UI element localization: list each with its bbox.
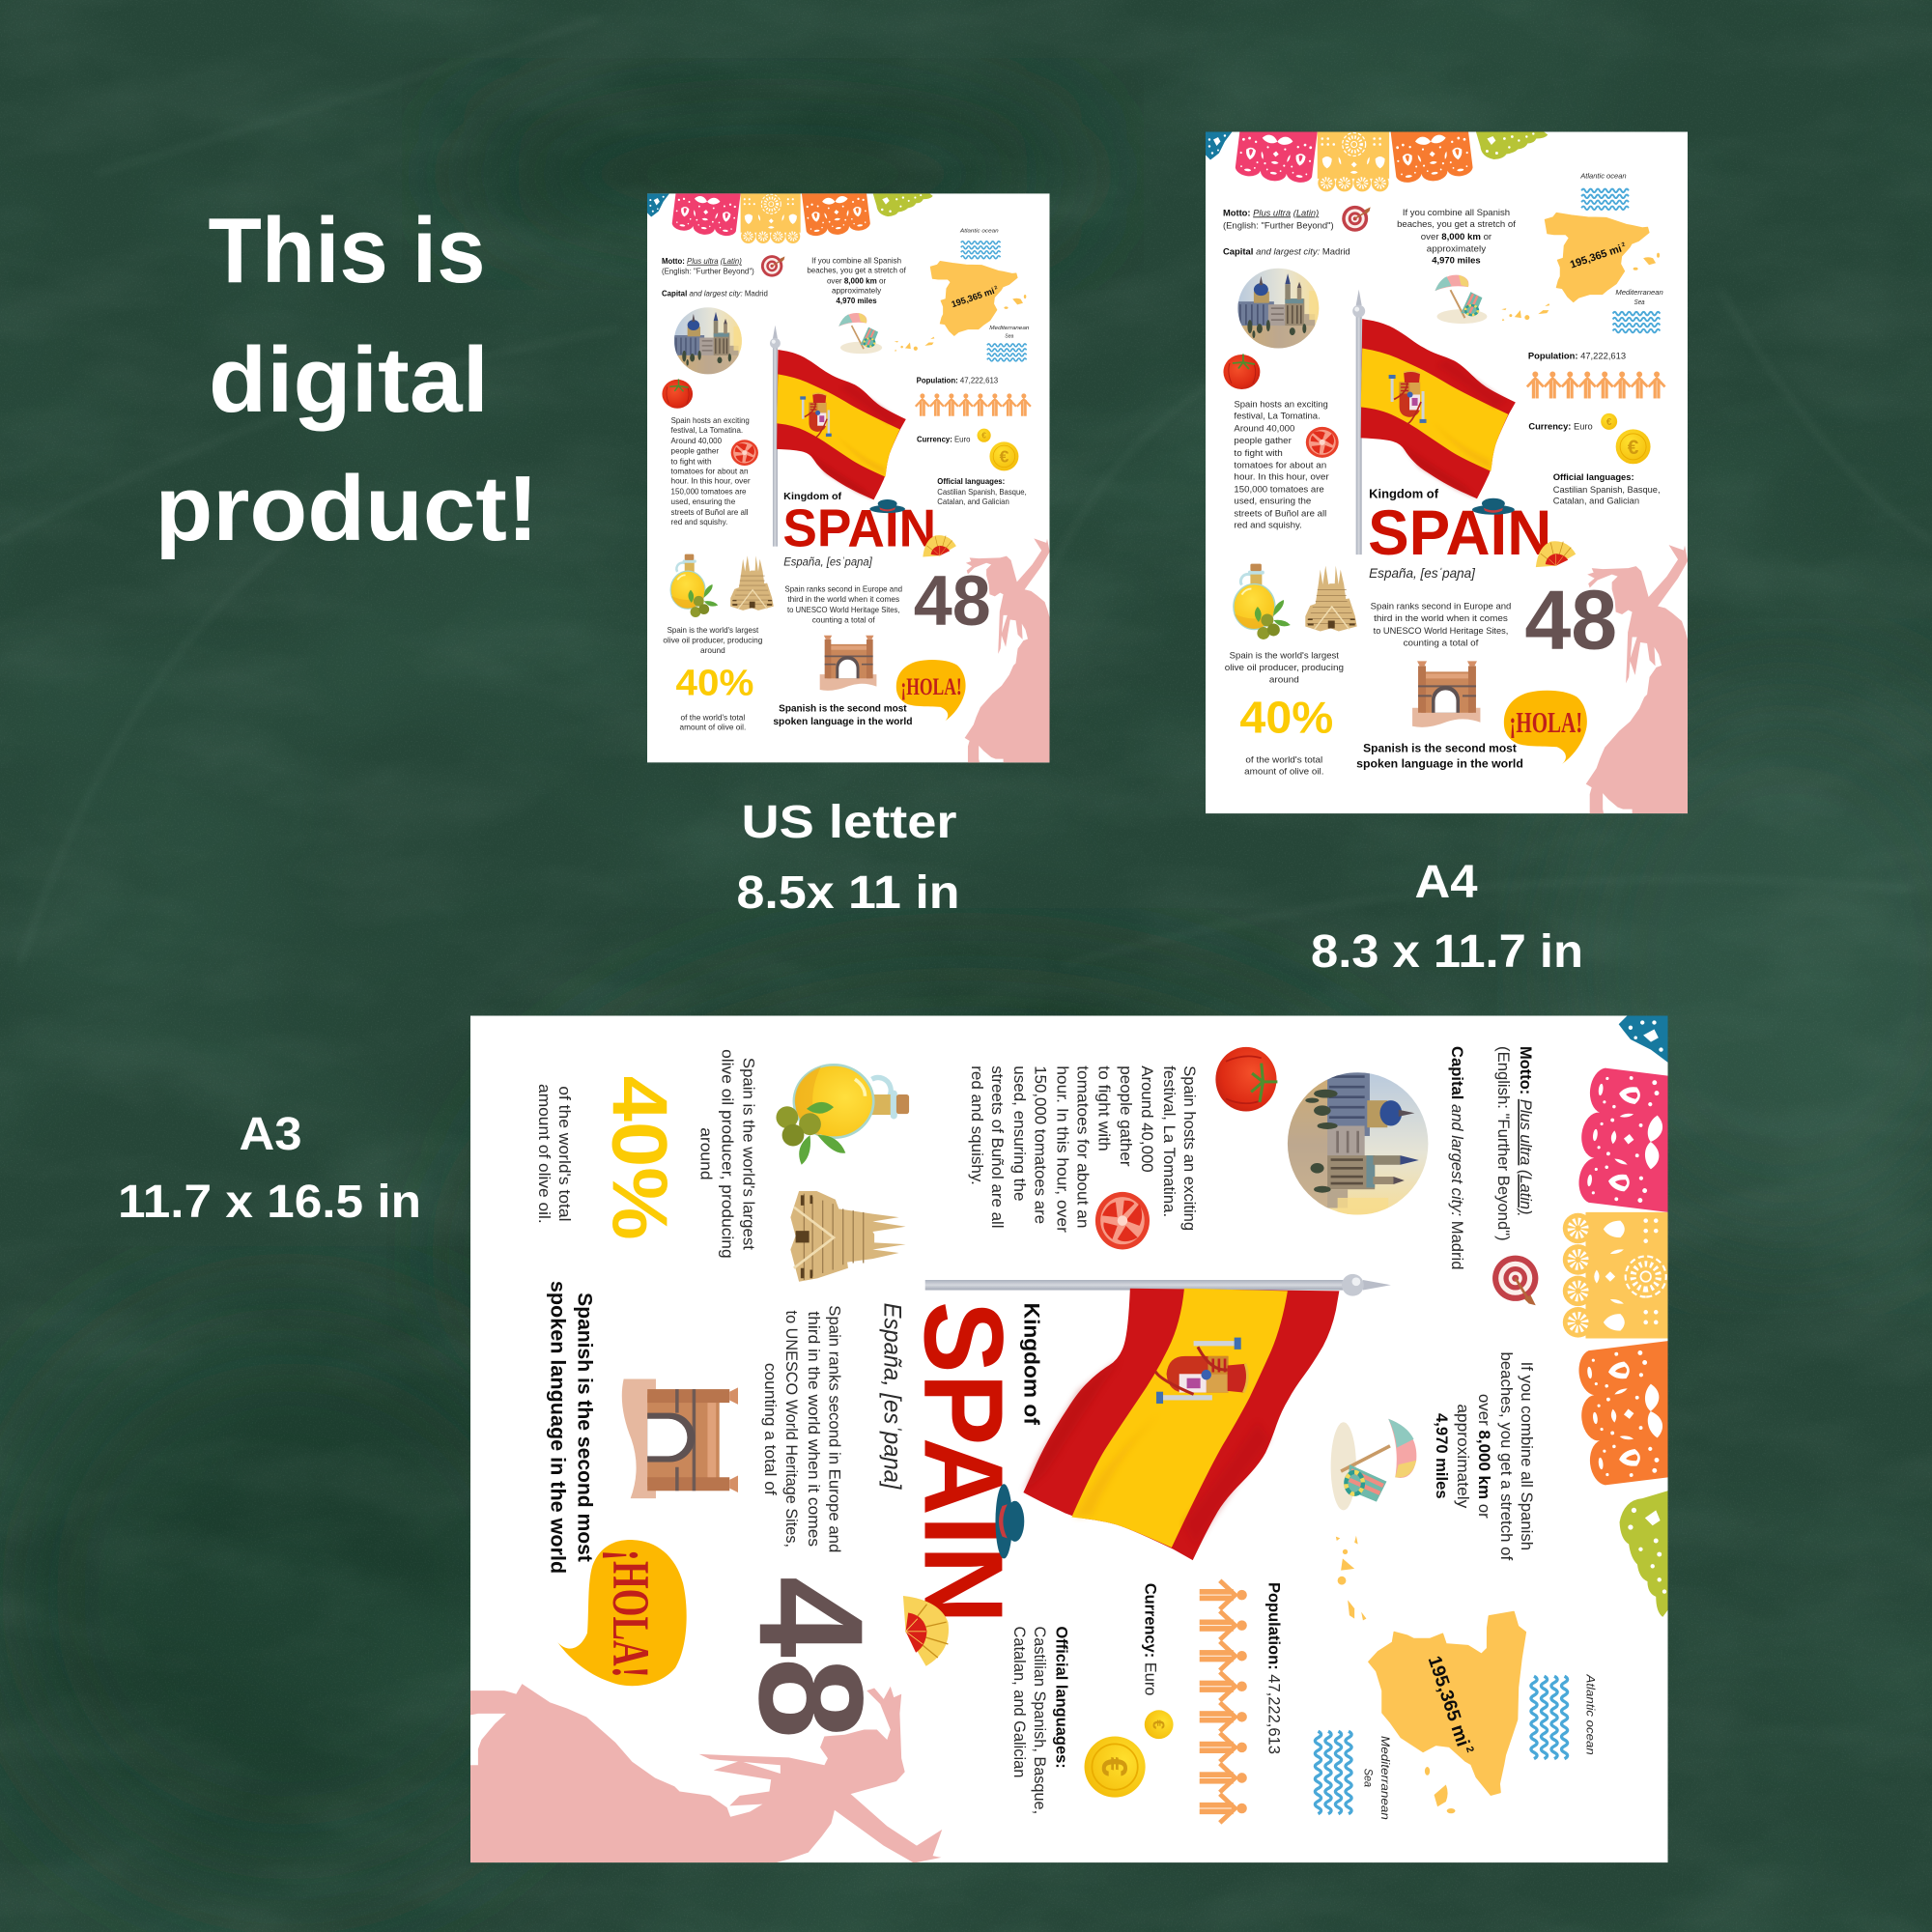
text: beaches: 4,970 miles [1433,1413,1451,1499]
motto: Motto: Plus ultra (Latin) [662,257,742,266]
photo: Madrid [1235,267,1323,353]
text: Spanish language: spoken language in the world [773,717,912,727]
label: Mediterranean Sea: Sea [1362,1769,1376,1787]
official languages: Official languages: [1053,1627,1071,1769]
text: beaches: 4,970 miles [1432,256,1481,267]
text: UNESCO: Spain ranks second in Europe and [826,1305,844,1552]
text: La Tomatina: tomatoes for about an [1234,460,1326,470]
text: La Tomatina: Around 40,000 [1138,1065,1156,1173]
capital: Capital and largest city: Madrid [1448,1046,1466,1269]
banner: green [1476,131,1548,159]
icon: beach [1435,275,1487,324]
icon: fan [1536,541,1576,567]
official languages: Castilian Spanish, Basque, [1031,1627,1049,1814]
banner: blue [1206,131,1232,159]
official languages: Official languages: [937,477,1005,486]
text: UNESCO: third in the world when it comes [787,595,899,604]
map of Spain [1501,213,1660,321]
text: La Tomatina: used, ensuring the [671,497,736,506]
icon: olive oil [670,554,718,617]
speech bubble [896,660,966,721]
text: share of olive oil [680,714,746,732]
icon: Arc de Triomf [820,636,876,691]
label: A4 [1311,857,1583,978]
motto: (English: "Further Beyond") [662,268,754,276]
text: olive oil [1225,650,1344,685]
text: La Tomatina: 150,000 tomatoes are [671,488,747,497]
photo: Madrid [671,306,746,378]
text: Spanish language [773,703,912,727]
flag pole [770,326,781,547]
icon: Arc de Triomf [622,1379,738,1498]
dancer silhouette [1586,545,1688,814]
text: La Tomatina: Spain hosts an exciting [1180,1065,1199,1231]
label: Mediterranean Sea: Mediterranean [1378,1736,1392,1820]
subtitle: España, [esˈpaɲa] [1369,565,1476,581]
label: Mediterranean Sea [1615,290,1663,306]
text: beaches [1397,208,1516,267]
number: 48: 48 [914,562,991,640]
text: La Tomatina [968,1065,1199,1233]
banner: orange [802,193,870,236]
dancer silhouette [965,538,1049,763]
text: La Tomatina: festival, La Tomatina. [671,426,743,435]
text: UNESCO: to UNESCO World Heritage Sites, [1374,626,1508,637]
icon: target [1492,1256,1538,1305]
speech bubble [1504,691,1587,764]
official languages: Catalan, and Galician [1553,497,1639,507]
icon: tomato slice [1095,1192,1150,1249]
text: La Tomatina: hour. In this hour, over [1053,1065,1071,1233]
icon: euro coins [1601,413,1651,464]
banner: green [1620,1491,1667,1617]
text: La Tomatina: Spain hosts an exciting [1234,399,1328,410]
text: beaches: approximately [1454,1404,1472,1509]
text: UNESCO: third in the world when it comes [1374,613,1508,624]
text: UNESCO [784,585,902,624]
map of Spain [895,261,1026,352]
text: olive oil: around [1269,674,1299,685]
text: share of olive oil [1244,755,1324,778]
banner: yellow [1563,1212,1667,1338]
icon: beach [838,313,882,354]
icon: euro coins: € [1150,1719,1169,1729]
label: Mediterranean Sea [989,326,1029,340]
label: US letter [736,797,960,919]
text: beaches: If you combine all Spanish [1518,1362,1536,1550]
artwork layer clipped to page [1206,105,1688,814]
icon: euro coins: € [1000,447,1009,467]
text: beaches: approximately [1427,243,1486,254]
number: 40%: 40% [595,1076,682,1240]
heading: This is digital product: digital [209,328,489,432]
Spanish flag [1023,1289,1339,1560]
artwork layer clipped to page [647,171,1049,763]
label: US letter: US letter [742,797,956,848]
label: Atlantic ocean: Atlantic ocean [1583,1673,1597,1755]
icon: hat [995,1484,1024,1558]
icon: Sagrada Familia [730,555,774,611]
text: UNESCO: third in the world when it comes [805,1311,823,1547]
icon: people row [1527,372,1665,398]
text: La Tomatina: Spain hosts an exciting [671,416,750,425]
text: La Tomatina: streets of Buñol are all [671,508,749,517]
title: SPAIN: SPAIN [782,498,936,558]
label: Mediterranean Sea: Mediterranean [1615,290,1663,297]
text: La Tomatina: people gather [671,446,720,455]
poster: A3, rotated [469,1016,1715,1862]
official languages: Catalan, and Galician [937,497,1009,506]
icon: olive oil [1234,564,1291,639]
official languages [1553,472,1661,507]
banner: blue [647,193,669,217]
label: A3: A3 [240,1109,301,1160]
paper sheet [470,1016,1667,1862]
area label: 2 [1621,242,1627,248]
icon: euro coins: € [1606,417,1612,428]
text: La Tomatina: red and squishy. [968,1065,986,1185]
text: share of olive oil: amount of olive oil. [1244,767,1324,778]
number: 48: 48 [1524,572,1617,667]
Spanish flag [777,350,906,499]
text: La Tomatina: used, ensuring the [1010,1065,1029,1201]
text: Spanish language: spoken language in the world [546,1281,568,1574]
text: olive oil [663,626,762,655]
text: Spanish language [546,1281,595,1574]
text: La Tomatina: hour. In this hour, over [671,477,751,486]
text: La Tomatina: tomatoes for about an [1074,1065,1093,1229]
banner: blue [1619,1016,1667,1063]
label: Mediterranean Sea: Mediterranean [989,326,1029,331]
motto: Motto: Plus ultra (Latin) [1517,1046,1535,1215]
icon: euro coins [1085,1710,1174,1798]
icon: euro coins: € [1094,1757,1134,1776]
poster: US letter [647,171,1049,763]
speech bubble: ¡HOLA! [602,1549,660,1678]
text: beaches [1433,1352,1536,1561]
text: beaches: approximately [832,287,881,296]
text: La Tomatina: to fight with [671,457,712,466]
map of Spain [1336,1536,1525,1813]
text: La Tomatina: Around 40,000 [1234,423,1294,434]
population: Population: 47,222,613 [917,377,999,385]
text: La Tomatina: hour. In this hour, over [1234,471,1329,482]
area label: 195,365 mi [1569,243,1623,271]
text: UNESCO [1371,602,1511,648]
banner: pink [1574,1066,1715,1216]
text: La Tomatina: used, ensuring the [1234,497,1311,507]
text: beaches: beaches, you get a stretch of [1497,1352,1516,1561]
title: SPAIN: SPAIN [1368,497,1551,568]
icon: Mediterranean waves [1613,312,1660,332]
label: Mediterranean Sea: Sea [1005,334,1014,340]
banner: pink [1235,105,1320,185]
banner: yellow [1318,131,1389,191]
text: olive oil: around [696,1127,715,1180]
title: Kingdom of: Kingdom of [1019,1303,1043,1426]
banner: green [873,193,933,216]
label: A3: 11.7 x 16.5 in [118,1177,421,1228]
text: share of olive oil [535,1084,574,1224]
label: A4: A4 [1414,857,1478,908]
icon: fan [923,535,956,556]
official languages [937,477,1027,506]
icon: beach [1331,1419,1416,1510]
banner: orange [1388,105,1474,185]
banner: pink [672,193,741,236]
text: UNESCO: Spain ranks second in Europe and [1371,602,1511,612]
icon: olive oil [776,1065,909,1165]
icon: hat [1472,498,1515,515]
speech bubble [557,1540,687,1686]
banner: yellow [741,193,801,243]
label: Mediterranean Sea: Sea [1634,299,1645,306]
label: US letter: 8.5x 11 in [736,867,960,919]
text: UNESCO: to UNESCO World Heritage Sites, [782,1311,801,1548]
banner: orange [1574,1337,1715,1487]
icon: tomato slice [731,440,758,466]
number: 40%: 40% [1239,692,1333,742]
label: A4: 8.3 x 11.7 in [1311,926,1583,978]
label: Mediterranean Sea [1362,1736,1392,1820]
text: Spanish language: Spanish is the second most [1363,742,1517,755]
text: UNESCO: Spain ranks second in Europe and [784,585,902,594]
label: Atlantic ocean: Atlantic ocean [959,228,999,234]
capital: Capital and largest city: Madrid [662,290,768,298]
icon: Mediterranean waves [1315,1731,1351,1814]
text: beaches: over 8,000 km or [1475,1394,1493,1519]
artwork layer clipped to page [469,1016,1715,1862]
subtitle: España, [esˈpaɲa] [879,1303,905,1491]
text: share of olive oil: of the world's total [1245,755,1322,766]
text: beaches: If you combine all Spanish [811,256,901,265]
text: La Tomatina: streets of Buñol are all [1234,509,1326,520]
icon: Arc de Triomf [1412,661,1480,727]
number: 40%: 40% [676,662,753,703]
motto: (English: "Further Beyond") [1223,220,1334,231]
official languages [1010,1627,1071,1814]
motto [1494,1046,1535,1241]
currency: Currency: Euro [1528,421,1593,432]
currency: Currency: Euro [917,435,971,443]
Spanish flag [1361,319,1516,498]
icon: target [1342,206,1371,232]
text: La Tomatina: festival, La Tomatina. [1160,1065,1179,1217]
icon: Mediterranean waves [987,344,1027,361]
text: La Tomatina: to fight with [1094,1065,1113,1151]
capital: Capital and largest city: Madrid [1223,247,1350,258]
motto: Motto: Plus ultra (Latin) [1223,208,1319,218]
area label: 195,365 mi [951,286,996,309]
text: La Tomatina: tomatoes for about an [671,468,749,476]
paper sheet [1206,131,1688,813]
text: share of olive oil: of the world's total [681,714,745,723]
text: olive oil: Spain is the world's largest [1230,650,1339,661]
text: UNESCO: counting a total of [1404,638,1479,648]
text: Spanish language: spoken language in the world [1356,757,1523,771]
flag pole [1352,290,1365,554]
icon: Sagrada Familia [790,1191,906,1282]
motto [1223,208,1334,231]
text: UNESCO: to UNESCO World Heritage Sites, [787,606,900,614]
title: SPAIN: SPAIN [901,1301,1027,1624]
text: La Tomatina: red and squishy. [1234,521,1302,531]
official languages: Castilian Spanish, Basque, [937,488,1027,497]
icon: hat [869,499,905,513]
icon: tomato [1223,355,1260,389]
text: beaches: beaches, you get a stretch of [1397,219,1516,230]
number: 48: 48 [728,1577,895,1739]
heading: This is digital product: This is [209,199,485,302]
population: Population: 47,222,613 [1265,1582,1284,1754]
flag pole [925,1274,1391,1296]
text: beaches: If you combine all Spanish [1403,208,1510,218]
text: UNESCO [761,1305,844,1552]
motto [662,257,754,276]
subtitle: España, [esˈpaɲa] [783,556,873,569]
speech bubble: ¡HOLA! [1509,705,1582,739]
icon: euro coins [978,429,1018,470]
text: olive oil: Spain is the world's largest [739,1058,757,1250]
text: La Tomatina: red and squishy. [671,518,727,526]
icon: tomato [1215,1047,1277,1112]
text: beaches: over 8,000 km or [1421,232,1492,242]
text: olive oil: around [700,646,725,655]
area label: 2 [994,285,999,292]
text: Spanish language: Spanish is the second most [779,703,907,714]
text: La Tomatina: 150,000 tomatoes are [1234,484,1324,495]
area label: 195,365 mi [1424,1654,1473,1749]
text: La Tomatina: people gather [1117,1065,1135,1167]
dancer silhouette [469,1684,942,1862]
area label: 2 [1463,1745,1476,1754]
text: beaches: 4,970 miles [837,297,877,305]
icon: Atlantic waves [961,242,1000,259]
text: UNESCO: counting a total of [812,615,876,624]
currency: Currency: Euro [1142,1583,1160,1695]
title: Kingdom of: Kingdom of [783,492,842,502]
text: Spanish language: Spanish is the second most [573,1293,595,1562]
label: Atlantic ocean: Atlantic ocean [1579,173,1627,180]
text: La Tomatina [1234,399,1329,531]
text: La Tomatina: people gather [1234,436,1292,446]
text: La Tomatina: festival, La Tomatina. [1234,411,1321,421]
icon: euro coins: € [1628,437,1639,459]
icon: Sagrada Familia [1305,566,1357,631]
label: A3 [118,1109,421,1228]
heading: This is digital product [155,199,539,560]
text: beaches [807,256,907,305]
poster: A4 [1206,105,1688,814]
text: beaches: beaches, you get a stretch of [807,266,907,274]
text: share of olive oil: amount of olive oil. [535,1084,554,1224]
text: olive oil [696,1049,757,1259]
text: La Tomatina: to fight with [1234,448,1283,459]
heading: This is digital product: product! [155,457,539,560]
icon: fan [903,1596,949,1666]
population: Population: 47,222,613 [1528,352,1626,362]
icon: target [761,255,784,277]
icon: Atlantic waves [1531,1676,1568,1759]
text: share of olive oil: amount of olive oil. [680,724,746,732]
icon: people row [1200,1580,1247,1823]
official languages: Castilian Spanish, Basque, [1553,485,1661,496]
official languages: Official languages: [1553,472,1634,483]
text: beaches: over 8,000 km or [827,276,887,285]
icon: euro coins: € [981,431,986,440]
icon: tomato [662,379,693,409]
icon: tomato slice [1306,427,1339,458]
icon: Atlantic waves [1581,189,1629,210]
text: La Tomatina: streets of Buñol are all [988,1065,1007,1229]
speech bubble: ¡HOLA! [900,672,962,700]
official languages: Catalan, and Galician [1010,1627,1029,1777]
text: olive oil: olive oil producer, producing [1225,663,1344,673]
icon: people row [916,393,1031,416]
text: olive oil: Spain is the world's largest [668,626,759,635]
text: share of olive oil: of the world's total [555,1086,574,1222]
title: Kingdom of: Kingdom of [1369,488,1439,501]
text: La Tomatina [671,416,751,526]
text: UNESCO: counting a total of [761,1363,780,1495]
motto: (English: "Further Beyond") [1494,1046,1513,1241]
paper sheet [647,193,1049,762]
text: olive oil: olive oil producer, producing [718,1049,736,1259]
text: La Tomatina: Around 40,000 [671,437,723,445]
photo: Madrid [1280,1066,1431,1223]
text: La Tomatina: 150,000 tomatoes are [1032,1065,1050,1224]
text: Spanish language [1356,742,1523,771]
text: olive oil: olive oil producer, producing [663,637,762,645]
